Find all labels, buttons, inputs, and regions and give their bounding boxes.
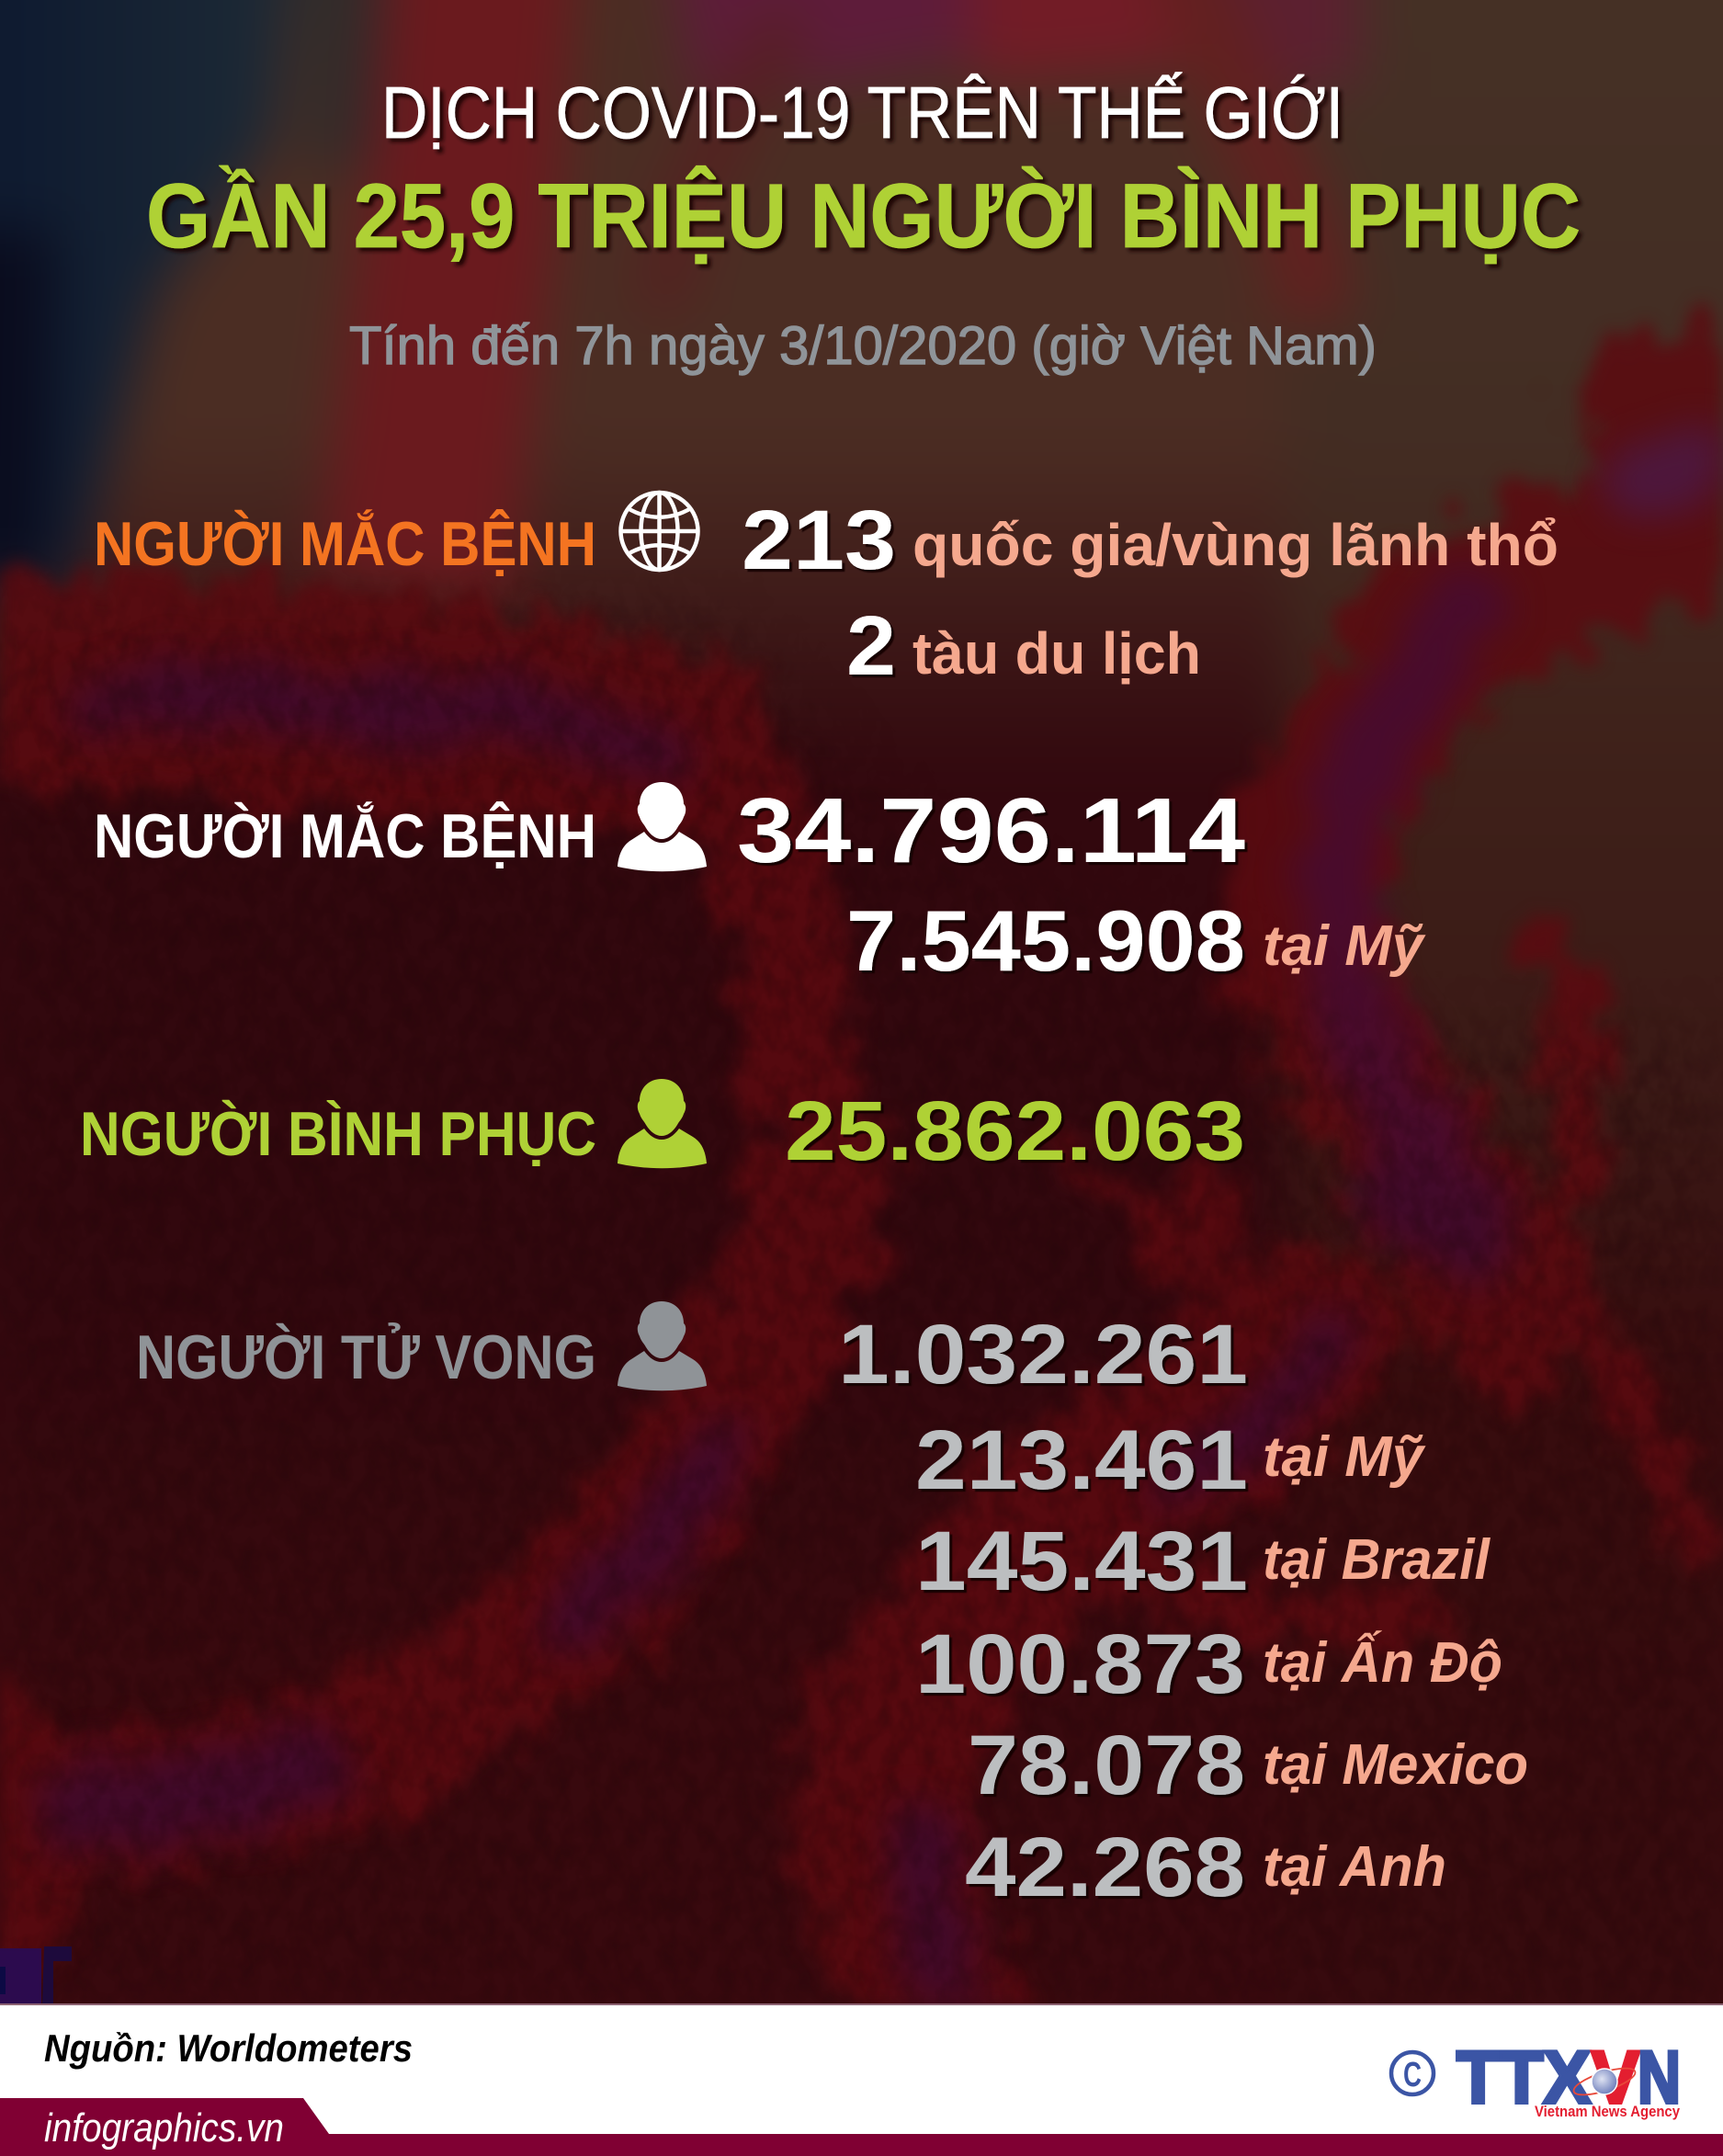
icon: person <box>618 1301 707 1390</box>
footer white panel <box>0 2004 1723 2156</box>
value: recovered: 25.862.063 <box>785 1084 1245 1178</box>
note: India: tại Ấn Độ <box>1263 1631 1502 1695</box>
value: total deaths: 1.032.261 <box>838 1308 1248 1401</box>
value: cases in USA: 7.545.908 <box>846 892 1245 989</box>
note: USA: tại Mỹ <box>1263 1425 1426 1489</box>
source: Nguồn: Worldometers <box>44 2026 413 2070</box>
wordmark: TTX <box>1457 2037 1591 2119</box>
red veins <box>0 377 1723 2013</box>
note: cruise ships: tàu du lịch <box>913 620 1201 687</box>
title line 2: GẦN 25,9 TRIỆU NGƯỜI BÌNH PHỤC <box>146 165 1581 267</box>
value: 213: 213 <box>742 494 896 587</box>
wordmark: V <box>1592 2037 1639 2119</box>
value: 2: 2 <box>846 599 896 693</box>
label: NGƯỜI BÌNH PHỤC <box>80 1099 596 1169</box>
icon: globe <box>621 493 698 570</box>
footer maroon band and tab <box>0 2098 1723 2156</box>
value: Brazil deaths: 145.431 <box>915 1515 1248 1608</box>
note: countries: quốc gia/vùng lãnh thổ <box>913 512 1559 578</box>
title line 1: DỊCH COVID-19 TRÊN THẾ GIỚI <box>381 72 1343 153</box>
row: total cases <box>94 779 1426 989</box>
tagline: Vietnam News Agency <box>1535 2103 1680 2120</box>
note: Mexico: tại Mexico <box>1263 1733 1528 1797</box>
copyright mark: C <box>1403 2056 1422 2094</box>
subtitle date: Tính đến 7h ngày 3/10/2020 (giờ Việt Nam) <box>349 316 1377 376</box>
mottled texture <box>0 570 1723 2004</box>
label: NGƯỜI MẮC BỆNH <box>94 800 596 871</box>
logo globe <box>1571 2063 1638 2100</box>
value: total cases: 34.796.114 <box>737 779 1245 882</box>
copyright mark <box>1391 2052 1434 2094</box>
label: NGƯỜI MẮC BỆNH <box>94 508 596 579</box>
purple vein cores <box>83 460 1709 2003</box>
value: Mexico deaths: 78.078 <box>968 1719 1245 1812</box>
label: NGƯỜI TỬ VONG <box>136 1322 596 1392</box>
icon: person <box>618 1079 707 1168</box>
logo: TTXVN <box>1391 2037 1681 2120</box>
value: USA deaths: 213.461 <box>915 1413 1248 1507</box>
website: infographics.vn <box>44 2105 284 2150</box>
note: UK: tại Anh <box>1263 1835 1446 1899</box>
title <box>146 72 1581 376</box>
footer <box>0 2003 1723 2156</box>
note: in USA: tại Mỹ <box>1263 914 1426 978</box>
row: recovered <box>80 1079 1245 1178</box>
value: UK deaths: 42.268 <box>965 1821 1245 1914</box>
row: deaths <box>136 1301 1528 1914</box>
wordmark <box>1457 2037 1681 2119</box>
note: Brazil: tại Brazil <box>1263 1528 1491 1592</box>
value: India deaths: 100.873 <box>915 1617 1245 1711</box>
icon: person <box>618 782 707 871</box>
row: countries with cases <box>94 493 1559 693</box>
wordmark: N <box>1638 2037 1681 2119</box>
